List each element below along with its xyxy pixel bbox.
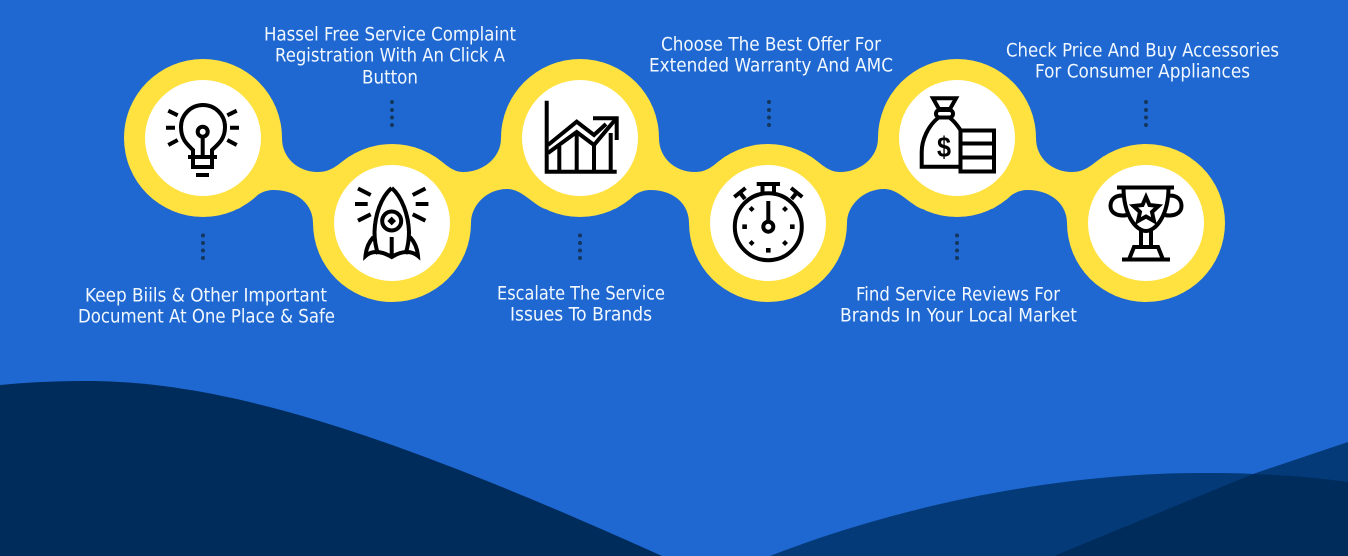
yellow connected circle ribbon xyxy=(124,59,1225,302)
dotted connector: step 4 xyxy=(767,100,771,127)
dotted connector: step 3 xyxy=(578,234,582,260)
text: step 2 xyxy=(264,24,516,88)
dotted connector: step 2 xyxy=(390,100,394,127)
text: step 4 xyxy=(649,34,893,76)
text: step 3: Escalate The Service xyxy=(497,284,665,304)
text: step 3: Issues To Brands xyxy=(510,304,652,326)
wave: bottom right xyxy=(770,442,1348,556)
white circle: step 3 xyxy=(522,80,638,196)
text: step 4: Extended Warranty And AMC xyxy=(649,56,893,76)
dotted connector: step 6 xyxy=(1144,100,1148,127)
icon: growth chart xyxy=(547,101,617,172)
icon: money bag and coins: $ xyxy=(937,132,951,164)
text: step 3 xyxy=(497,284,665,326)
icon: trophy xyxy=(1110,188,1182,260)
text: step 6: Check Price And Buy Accessories xyxy=(1006,40,1279,62)
white circle: step 6 xyxy=(1088,165,1204,281)
icon: money bag and coins xyxy=(922,98,994,172)
text: step 2: Hassel Free Service Complaint xyxy=(264,24,516,46)
text: step 6: For Consumer Appliances xyxy=(1035,62,1250,82)
text: step 6 xyxy=(1006,40,1279,82)
icon: rocket xyxy=(355,188,428,258)
text: step 1: Document At One Place & Safe xyxy=(78,306,335,328)
wave: bottom left xyxy=(0,381,662,556)
text: step 5: Find Service Reviews For xyxy=(856,284,1060,306)
text: step 4: Choose The Best Offer For xyxy=(661,34,881,56)
white circle: step 4 xyxy=(710,165,826,281)
white circle: step 1 xyxy=(145,80,261,196)
icon: stopwatch xyxy=(734,184,802,260)
text: step 2: Button xyxy=(362,68,418,88)
text: step 5 xyxy=(840,284,1077,326)
text: step 1: Keep Biils & Other Important xyxy=(85,286,327,306)
text: step 5: Brands In Your Local Market xyxy=(840,306,1077,326)
dotted connector: step 5 xyxy=(955,234,959,260)
white circle: step 2 xyxy=(334,165,450,281)
text: step 1 xyxy=(78,286,335,328)
text: step 2: Registration With An Click A xyxy=(275,46,505,66)
dotted connector: step 1 xyxy=(201,234,205,260)
icon: light bulb xyxy=(166,105,239,175)
white circle: step 5 xyxy=(899,80,1015,196)
